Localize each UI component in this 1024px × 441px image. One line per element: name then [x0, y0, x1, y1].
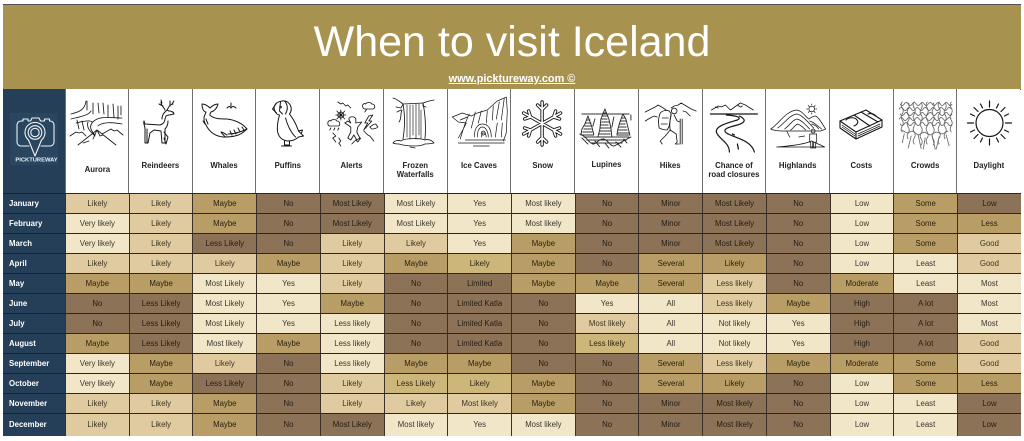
- row: July: No: [92, 319, 102, 328]
- row: September: Less likely: [717, 359, 753, 368]
- row: December: Yes: [473, 420, 486, 429]
- row: April: Likely: [725, 259, 745, 268]
- website link: www.picktureway.com ©: [449, 73, 575, 85]
- row: February: Most likely: [525, 219, 562, 228]
- row: April: Maybe: [404, 259, 428, 268]
- row: May: Several: [658, 279, 684, 288]
- row: February: Less: [981, 219, 998, 228]
- row: September: Some: [916, 359, 936, 368]
- row: October: [3, 373, 1021, 393]
- row: July: High: [854, 319, 870, 328]
- row: December: Most Likely: [333, 420, 372, 429]
- row: July: [3, 313, 1021, 333]
- row: January: Yes: [473, 199, 486, 208]
- row: June: Less Likely: [142, 299, 180, 308]
- row: January: Maybe: [213, 199, 236, 208]
- row: June: No: [538, 299, 548, 308]
- row: September: Maybe: [787, 359, 810, 368]
- column: Costs: [829, 89, 893, 193]
- label: Chance of: [715, 161, 753, 170]
- column: Crowds: [893, 89, 956, 193]
- row: May: No: [793, 279, 803, 288]
- row: May: Likely: [342, 279, 362, 288]
- row: August: Less likely: [334, 339, 370, 348]
- label: Highlands: [779, 161, 816, 170]
- row: December: Likely: [87, 420, 107, 429]
- row: November: Most likely: [461, 399, 498, 408]
- row: July: July: [9, 319, 25, 328]
- label: Crowds: [911, 161, 939, 170]
- row: March: Most Likely: [715, 239, 754, 248]
- label: Snow: [532, 161, 553, 170]
- row: April: Likely: [470, 259, 490, 268]
- row: June: Maybe: [341, 299, 364, 308]
- row: June: A lot: [918, 299, 933, 308]
- row: October: Less Likely: [206, 379, 244, 388]
- row: July: Yes: [282, 319, 295, 328]
- row: September: Moderate: [846, 359, 878, 368]
- column: Hikes: [638, 89, 702, 193]
- row: May: Limited: [467, 279, 492, 288]
- row: August: A lot: [918, 339, 933, 348]
- row: October: Less: [981, 379, 998, 388]
- row: March: Likely: [151, 239, 171, 248]
- row: July: All: [666, 319, 675, 328]
- row: April: Likely: [151, 259, 171, 268]
- row: January: Likely: [151, 199, 171, 208]
- row: October: October: [9, 379, 39, 388]
- row: September: Likely: [215, 359, 235, 368]
- icon: crowd of people: [898, 102, 953, 150]
- row: February: Minor: [661, 219, 681, 228]
- row: September: Maybe: [468, 359, 491, 368]
- row: August: All: [666, 339, 675, 348]
- row: September: No: [538, 359, 548, 368]
- row: November: Likely: [87, 399, 107, 408]
- row: August: Good: [980, 339, 999, 348]
- row: August: No: [411, 339, 421, 348]
- row: June: Limited Katla: [457, 299, 502, 308]
- row: October: No: [793, 379, 803, 388]
- row: September: Maybe: [149, 359, 173, 368]
- row: December: Low: [982, 420, 997, 429]
- row: November: Likely: [342, 399, 362, 408]
- row: March: Very likely: [80, 239, 115, 248]
- row: July: Most: [981, 319, 998, 328]
- row: June: Yes: [601, 299, 613, 308]
- row: October: Likely: [342, 379, 362, 388]
- label: road closures: [708, 170, 759, 179]
- icon: whale: [202, 102, 248, 138]
- label: Daylight: [973, 161, 1004, 170]
- row: April: Maybe: [532, 259, 555, 268]
- row: June: Maybe: [787, 299, 810, 308]
- row: November: Low: [855, 399, 869, 408]
- row: August: Not likely: [719, 339, 750, 348]
- row: April: Good: [980, 259, 999, 268]
- label: Waterfalls: [397, 170, 434, 179]
- row: November: November: [9, 399, 47, 408]
- row: February: Some: [916, 219, 936, 228]
- row: September: September: [9, 359, 49, 368]
- row: September: [3, 353, 1021, 373]
- row: August: Less likely: [589, 339, 625, 348]
- icon: lupine flowers: [579, 108, 632, 148]
- row: November: Likely: [151, 399, 171, 408]
- row: October: Very likely: [80, 379, 115, 388]
- row: April: Likely: [342, 259, 362, 268]
- row: October: Likely: [470, 379, 490, 388]
- row: September: No: [602, 359, 612, 368]
- row: January: [3, 193, 1021, 213]
- row: September: Less likely: [334, 359, 370, 368]
- row: December: December: [9, 420, 47, 429]
- row: April: Low: [855, 259, 869, 268]
- row: July: Less likely: [334, 319, 370, 328]
- row: October: Likely: [725, 379, 745, 388]
- row: October: Less Likely: [397, 379, 435, 388]
- label: Frozen: [402, 161, 428, 170]
- row: November: Likely: [406, 399, 426, 408]
- row: January: Likely: [87, 199, 107, 208]
- row: April: Maybe: [277, 259, 300, 268]
- icon: waterfall: [392, 98, 434, 148]
- column: Frozen Waterfalls: [383, 89, 447, 193]
- row: November: No: [793, 399, 803, 408]
- row: December: Maybe: [213, 420, 236, 429]
- row: March: Yes: [473, 239, 486, 248]
- logo panel: [3, 89, 65, 193]
- row: May: No: [411, 279, 421, 288]
- label: Costs: [851, 161, 872, 170]
- row: December: Most likely: [398, 420, 434, 429]
- title: When to visit Iceland: [314, 18, 710, 66]
- row: May: Most: [981, 279, 998, 288]
- row: November: Maybe: [532, 399, 555, 408]
- row: August: Most likely: [207, 339, 243, 348]
- row: March: March: [9, 239, 32, 248]
- row: July: Not likely: [719, 319, 750, 328]
- row: January: Low: [855, 199, 869, 208]
- row: February: Maybe: [213, 219, 236, 228]
- icon: hiker with mountains: [644, 102, 697, 144]
- row: February: Likely: [151, 219, 171, 228]
- row: July: Limited Katla: [457, 319, 502, 328]
- icon: snowflake: [522, 100, 562, 147]
- row: April: No: [602, 259, 612, 268]
- row: April: April: [9, 259, 27, 268]
- row: October: No: [602, 379, 612, 388]
- row: June: Most Likely: [205, 299, 244, 308]
- column: Lupines: [574, 89, 638, 193]
- row: January: Most Likely: [715, 199, 754, 208]
- label: Lupines: [592, 160, 621, 168]
- row: October: Maybe: [149, 379, 173, 388]
- row: May: Maybe: [86, 279, 109, 288]
- row: December: Low: [855, 420, 869, 429]
- icon: puffin: [272, 100, 304, 146]
- row: January: Most Likely: [333, 199, 372, 208]
- row: July: Most likely: [589, 319, 625, 328]
- row: November: Low: [982, 399, 997, 408]
- row: December: Most likely: [716, 420, 753, 429]
- row: December: [3, 413, 1021, 436]
- column: Chance of road closures: [702, 89, 765, 193]
- row: January: Low: [982, 199, 997, 208]
- row: June: Less likely: [717, 299, 753, 308]
- icon: natural hazards around a figure: [327, 102, 378, 146]
- row: August: August: [9, 339, 36, 348]
- row: June: No: [92, 299, 102, 308]
- row: March: Minor: [661, 239, 681, 248]
- column: Reindeers: [128, 89, 192, 193]
- row: March: Likely: [406, 239, 426, 248]
- row: June: June: [9, 299, 27, 308]
- row: May: Yes: [282, 279, 295, 288]
- row: November: Minor: [661, 399, 681, 408]
- label: Aurora: [85, 165, 110, 174]
- row: December: Minor: [661, 420, 681, 429]
- row: August: Less Likely: [142, 339, 180, 348]
- row: December: No: [602, 420, 612, 429]
- column: Daylight: [956, 89, 1020, 193]
- label: Hikes: [660, 161, 681, 170]
- column: Snow: [510, 89, 574, 193]
- row: October: No: [284, 379, 294, 388]
- row: August: Maybe: [86, 339, 109, 348]
- row: March: No: [602, 239, 612, 248]
- row: February: Yes: [473, 219, 486, 228]
- row: February: Most Likely: [333, 219, 372, 228]
- row: January: No: [602, 199, 612, 208]
- row: February: No: [793, 219, 803, 228]
- column: Aurora: [65, 89, 129, 193]
- row: December: No: [284, 420, 294, 429]
- row: March: Good: [980, 239, 999, 248]
- row: October: Some: [916, 379, 936, 388]
- row: September: Very likely: [80, 359, 115, 368]
- row: March: Maybe: [532, 239, 555, 248]
- row: September: Maybe: [404, 359, 428, 368]
- row: August: Limited Katla: [457, 339, 502, 348]
- row: March: Likely: [342, 239, 362, 248]
- row: February: Very likely: [80, 219, 115, 228]
- row: August: High: [854, 339, 870, 348]
- title banner: [3, 4, 1021, 89]
- row: January: No: [284, 199, 294, 208]
- row: March: Low: [855, 239, 869, 248]
- icon: ice cave: [452, 96, 508, 146]
- row: May: Maybe: [595, 279, 619, 288]
- row: January: January: [9, 199, 39, 208]
- row: March: Less Likely: [206, 239, 244, 248]
- row: November: Least: [916, 399, 935, 408]
- row: February: Most Likely: [715, 219, 754, 228]
- row: August: Maybe: [277, 339, 300, 348]
- row: May: Moderate: [846, 279, 878, 288]
- row: February: Low: [855, 219, 869, 228]
- row: August: [3, 333, 1021, 353]
- row: December: Likely: [151, 420, 171, 429]
- row: September: No: [284, 359, 294, 368]
- icon: highland mountains with hiker: [770, 104, 826, 148]
- row: February: Most Likely: [396, 219, 435, 228]
- row: June: Yes: [282, 299, 295, 308]
- row: March: No: [284, 239, 294, 248]
- row: November: Maybe: [213, 399, 236, 408]
- row: December: No: [793, 420, 803, 429]
- row: July: Less Likely: [142, 319, 180, 328]
- row: August: Yes: [792, 339, 805, 348]
- row: July: A lot: [918, 319, 933, 328]
- label: [708, 161, 760, 179]
- row: December: Most likely: [525, 420, 562, 429]
- row: July: Most Likely: [205, 319, 244, 328]
- column: Highlands: [765, 89, 829, 193]
- row: October: Several: [658, 379, 684, 388]
- row: March: No: [793, 239, 803, 248]
- row: May: Maybe: [149, 279, 173, 288]
- column: Ice Caves: [447, 89, 510, 193]
- row: April: Least: [916, 259, 935, 268]
- row: September: Good: [980, 359, 999, 368]
- row: December: Least: [916, 420, 935, 429]
- row: May: Least: [916, 279, 935, 288]
- label: Puffins: [275, 161, 301, 170]
- logo panel: PICKTUREWAY: [15, 158, 58, 164]
- row: January: No: [793, 199, 803, 208]
- row: September: Several: [658, 359, 684, 368]
- row: May: Less likely: [717, 279, 753, 288]
- row: July: Yes: [792, 319, 805, 328]
- row: February: [3, 213, 1021, 233]
- row: November: Most likely: [716, 399, 753, 408]
- icon: sun: [966, 100, 1012, 146]
- row: July: No: [538, 319, 548, 328]
- row: October: Maybe: [532, 379, 555, 388]
- row: June: No: [411, 299, 421, 308]
- icon: stack of money: [839, 110, 883, 140]
- row: April: Likely: [87, 259, 107, 268]
- column: Alerts: [319, 89, 383, 193]
- row: May: [3, 273, 1021, 293]
- label: Alerts: [340, 161, 363, 170]
- row: January: Minor: [661, 199, 681, 208]
- row: February: February: [9, 219, 42, 228]
- row: June: High: [854, 299, 870, 308]
- icon: aurora over mountains: [70, 100, 124, 146]
- row: July: No: [411, 319, 421, 328]
- row: May: May: [9, 279, 24, 288]
- row: March: Some: [916, 239, 936, 248]
- row: June: [3, 293, 1021, 313]
- row: April: No: [793, 259, 803, 268]
- label: Ice Caves: [461, 161, 497, 170]
- row: November: [3, 393, 1021, 413]
- row: January: Most Likely: [396, 199, 435, 208]
- row: April: [3, 253, 1021, 273]
- row: February: No: [602, 219, 612, 228]
- row: June: Most: [981, 299, 998, 308]
- row: November: No: [602, 399, 612, 408]
- row: November: No: [284, 399, 294, 408]
- row: May: Maybe: [532, 279, 555, 288]
- icon: winding road: [710, 102, 758, 153]
- column: Puffins: [255, 89, 319, 193]
- row: August: No: [538, 339, 548, 348]
- label: Whales: [210, 161, 238, 170]
- column: Whales: [192, 89, 255, 193]
- row: April: Several: [658, 259, 684, 268]
- row: January: Some: [916, 199, 936, 208]
- label: Reindeers: [142, 161, 179, 170]
- label: [396, 161, 434, 179]
- row: May: Most Likely: [205, 279, 244, 288]
- row: October: Low: [855, 379, 869, 388]
- icon: reindeer: [143, 100, 174, 144]
- row: February: No: [284, 219, 294, 228]
- row: January: Most likely: [525, 199, 562, 208]
- row: June: All: [666, 299, 675, 308]
- row: March: [3, 233, 1021, 253]
- row: April: Likely: [215, 259, 235, 268]
